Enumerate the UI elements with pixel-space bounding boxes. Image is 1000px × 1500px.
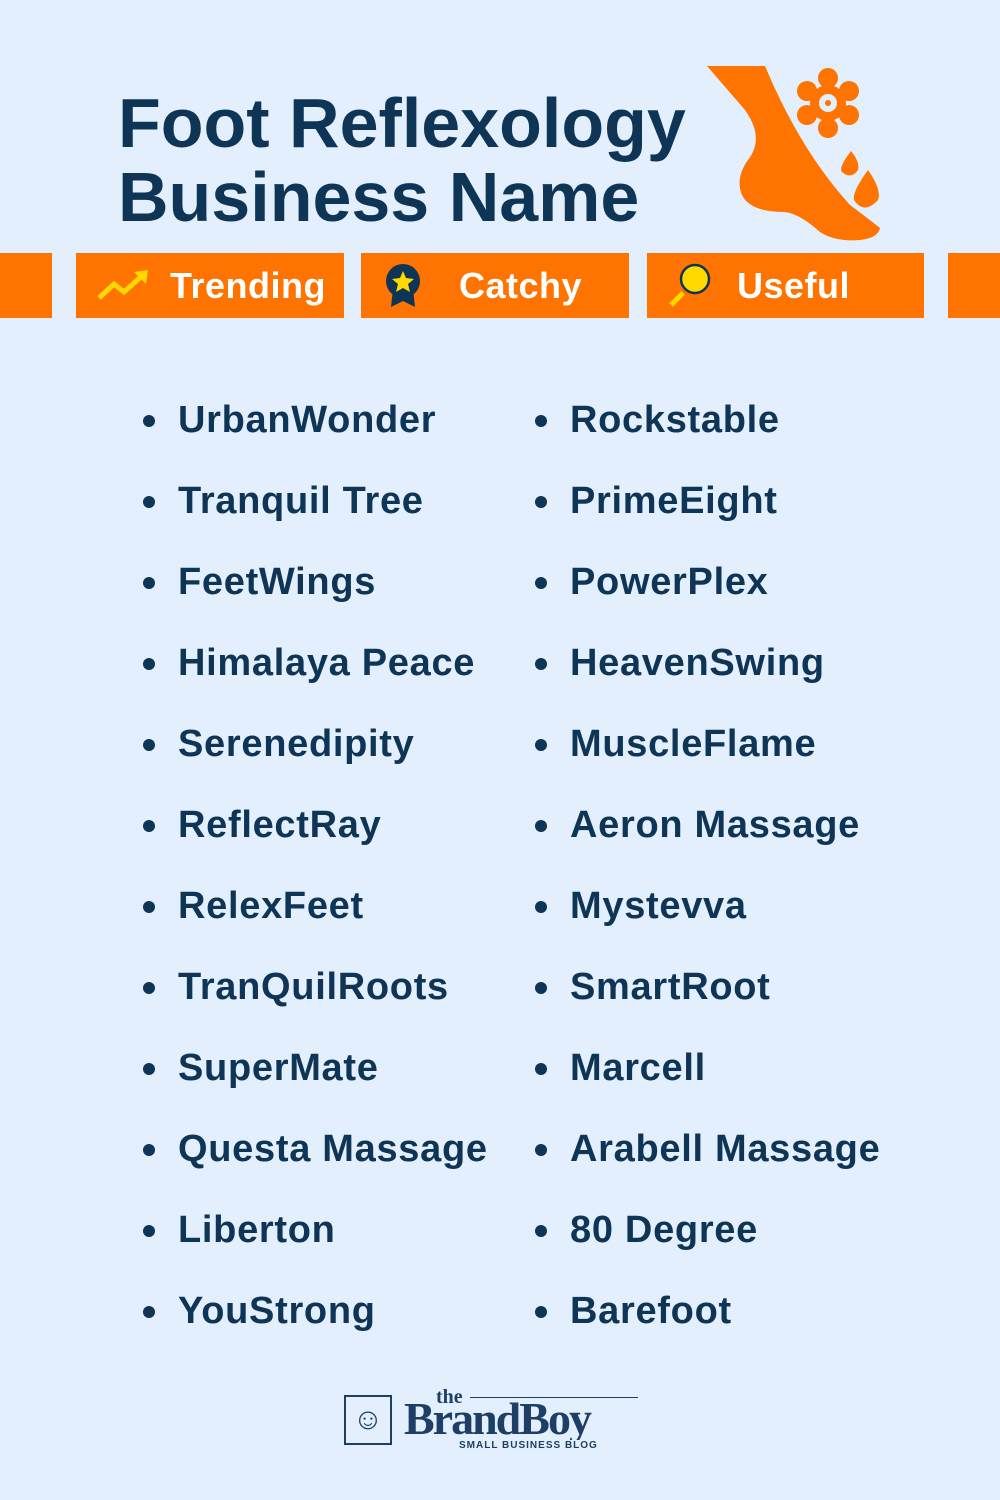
list: right column: Marcell bbox=[570, 1047, 706, 1089]
list: left column: Tranquil Tree bbox=[178, 480, 424, 522]
logo: the BrandBoy: ☺ bbox=[353, 1403, 383, 1436]
badge: useful: Useful bbox=[737, 264, 850, 306]
icon: foot with flower and drops bbox=[707, 66, 880, 240]
list: left column: ReflectRay bbox=[178, 804, 381, 846]
title: Business Name bbox=[118, 158, 639, 236]
decorative stubs bbox=[0, 253, 52, 318]
list: right column: Aeron Massage bbox=[570, 804, 860, 846]
logo: the BrandBoy bbox=[344, 1386, 638, 1451]
icon: magnifier bbox=[669, 264, 710, 307]
list: left column: SuperMate bbox=[178, 1047, 379, 1089]
list: right column: Rockstable bbox=[570, 399, 780, 441]
logo: the BrandBoy: SMALL BUSINESS BLOG bbox=[459, 1440, 598, 1451]
list: right column: HeavenSwing bbox=[570, 642, 825, 684]
list: right column: MuscleFlame bbox=[570, 723, 816, 765]
badge: catchy bbox=[361, 253, 629, 318]
list: right column bbox=[535, 399, 880, 1332]
list: right column: Barefoot bbox=[570, 1290, 732, 1332]
icon: trend arrow bbox=[97, 270, 148, 300]
list: left column: UrbanWonder bbox=[178, 399, 436, 441]
badge: trending: Trending bbox=[170, 264, 326, 306]
title: Foot Reflexology bbox=[118, 84, 686, 162]
list: right column: Mystevva bbox=[570, 885, 747, 927]
list: left column: RelexFeet bbox=[178, 885, 364, 927]
list: right column: SmartRoot bbox=[570, 966, 771, 1008]
list: left column: TranQuilRoots bbox=[178, 966, 449, 1008]
list: left column bbox=[143, 399, 488, 1332]
list: left column: FeetWings bbox=[178, 561, 376, 603]
title bbox=[118, 84, 686, 236]
list: left column: Liberton bbox=[178, 1209, 336, 1251]
logo: the BrandBoy: BrandBoy bbox=[404, 1393, 590, 1444]
list: right column: PrimeEight bbox=[570, 480, 778, 522]
logo: the BrandBoy: the bbox=[436, 1386, 463, 1408]
icon: medal star bbox=[386, 264, 420, 307]
list: right column: PowerPlex bbox=[570, 561, 769, 603]
list: right column: 80 Degree bbox=[570, 1209, 758, 1251]
list: right column: Arabell Massage bbox=[570, 1128, 880, 1170]
list: left column: YouStrong bbox=[178, 1290, 376, 1332]
list: left column: Himalaya Peace bbox=[178, 642, 475, 684]
list: left column: Serenedipity bbox=[178, 723, 414, 765]
badge: catchy: Catchy bbox=[459, 264, 582, 306]
badge: trending bbox=[76, 253, 344, 318]
badge: useful bbox=[647, 253, 924, 318]
list: left column: Questa Massage bbox=[178, 1128, 488, 1170]
